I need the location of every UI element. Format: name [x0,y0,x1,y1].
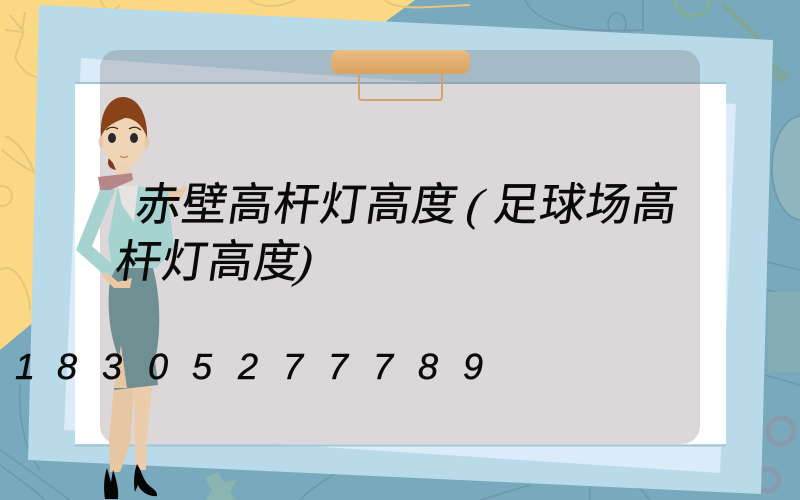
title line 2: 杆 [113,236,165,287]
phone number: 0 [148,346,168,387]
legs [109,386,134,472]
title line 1: 杆 [271,179,323,230]
phone number: 9 [463,346,483,387]
yellow doodles [0,0,470,310]
title line 2: 高 [205,236,257,287]
ears [98,136,106,148]
yellow background area [0,0,415,350]
phone number: 2 [238,346,258,387]
shoes [104,468,118,499]
title line 2 [113,236,316,287]
phone number: 1 [15,346,35,387]
title line 1: 高 [629,179,681,230]
phone number: 8 [418,346,438,387]
title line 1: 灯 [317,179,369,230]
phone number: 7 [328,346,348,387]
skirt [109,265,159,390]
hip hand [102,272,132,288]
eyes [108,133,116,143]
title line 1 [133,179,681,230]
clip frame [359,74,442,100]
phone number: 7 [373,346,393,387]
phone number [15,346,483,387]
title line 1: ( [464,180,486,230]
white sheet [75,84,726,444]
pointing hand [168,184,188,204]
title line 1: 壁 [179,179,231,230]
ponytail [108,158,116,170]
title line 1: 足 [491,179,543,230]
phone number: 7 [283,346,303,387]
blouse [118,186,138,222]
sheet shadow [75,445,726,447]
star doodle [205,472,236,500]
scarf [98,173,133,190]
title line 1: 赤 [133,179,185,230]
left arm [76,182,116,280]
grey overlay panel [100,50,700,444]
face [103,116,145,166]
phone number: 5 [192,346,212,387]
woman figure [76,97,188,499]
neck [115,158,131,184]
mouth [120,156,128,158]
title line 2: 灯 [159,236,211,287]
clip bar [331,50,470,74]
title line 1: 高 [225,179,277,230]
title line 1: 场 [583,179,635,230]
cardigan [108,186,174,268]
phone number: 8 [57,346,77,387]
phone number: 3 [102,346,122,387]
gears [757,418,794,491]
title line 2: ) [294,237,316,287]
title line 1: 球 [537,179,589,230]
title line 2: 度 [251,236,303,287]
sheet top and bottom edge shadow [75,83,726,446]
title line 1: 高 [363,179,415,230]
pale sheet [64,58,736,473]
bottom doodles [0,385,650,500]
right side doodles [525,0,800,385]
hair [101,97,147,138]
title line 1: 度 [409,179,461,230]
